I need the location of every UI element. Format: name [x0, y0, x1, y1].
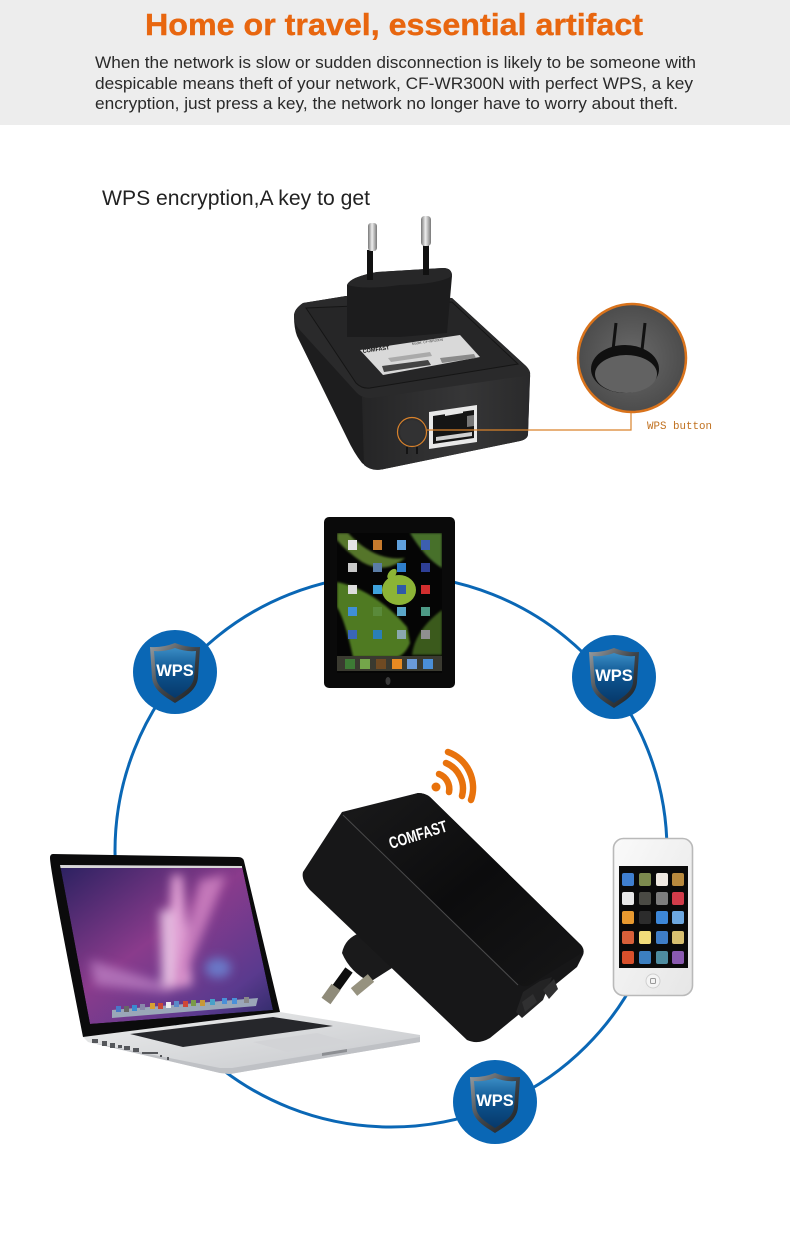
device body [294, 296, 530, 470]
WPS badge: bottom: WPS [476, 1092, 514, 1110]
top face [343, 793, 583, 986]
laptop base [83, 1012, 420, 1074]
magnified WPS button [578, 304, 686, 412]
device label sticker: Model: CF-WR300N [412, 338, 444, 346]
WPS badge: left: WPS [156, 662, 194, 680]
header band [0, 0, 790, 125]
brand wordmark: COMFAST [387, 818, 449, 853]
WPS button label: WPS button [647, 421, 712, 433]
WPS button with callout ring [398, 418, 426, 454]
laptop [50, 854, 420, 1074]
side ports [516, 977, 558, 1018]
tablet [324, 517, 455, 688]
connection ring [115, 575, 667, 1127]
EU plug [347, 216, 452, 337]
device label sticker: COMFAST [362, 345, 391, 355]
icon: orange wifi signal [432, 752, 473, 800]
intro paragraph [95, 53, 696, 113]
ethernet port [429, 405, 477, 449]
WPS badge: right [572, 635, 656, 719]
subheading: WPS encryption: WPS encryption,A key to get [102, 187, 370, 210]
intro paragraph: When the network is slow or sudden disconnection is likely to be someone with [95, 53, 696, 72]
tablet screen [337, 533, 442, 673]
laptop screen wallpaper [60, 865, 273, 1024]
callout leader line [427, 408, 631, 430]
plug [326, 933, 392, 1001]
black COMFAST repeater [303, 793, 584, 1042]
body [303, 793, 584, 1042]
title: Home or travel, essential artifact [145, 7, 643, 42]
WPS badge: left [133, 630, 217, 714]
laptop lid [50, 854, 280, 1037]
intro paragraph: despicable means theft of your network, CF-WR300N with perfect WPS, a key [95, 74, 694, 93]
product photo: repeater with EU plug and WPS button [294, 216, 712, 470]
WPS badge: bottom [453, 1060, 537, 1144]
intro paragraph: encryption, just press a key, the network no longer have to worry about theft. [95, 94, 678, 113]
WPS badge: right: WPS [595, 667, 633, 685]
phone [614, 838, 692, 996]
device label sticker [360, 335, 480, 375]
